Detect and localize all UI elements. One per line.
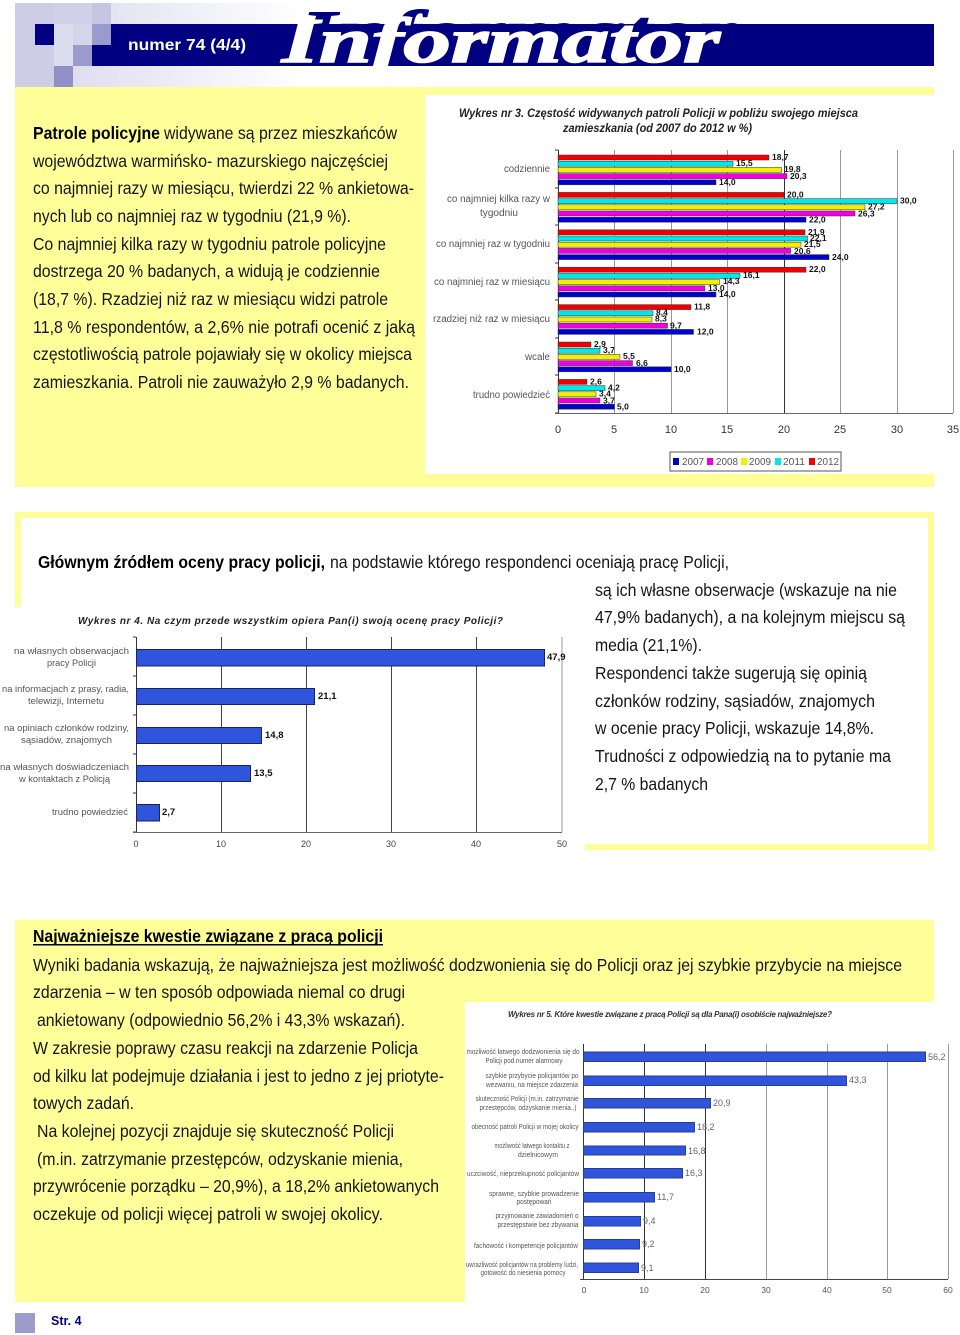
text block: patrols: (18,7 %). Rzadziej niż raz w miesiącu widzi patrole xyxy=(33,289,388,309)
legend: 2008 xyxy=(716,456,738,468)
axis values: 20 xyxy=(301,839,311,849)
axis values: 0 xyxy=(133,839,139,849)
value labels: 13,5 xyxy=(254,768,273,779)
axis values: 0 xyxy=(582,1285,587,1295)
bars: codziennie: 15,5 xyxy=(736,158,753,168)
value labels: 11,7 xyxy=(657,1192,674,1202)
text block: patrols: zamieszkania. Patroli nie zauważyło 2,9 % badanych. xyxy=(33,372,409,392)
panel: patrols xyxy=(15,87,960,487)
text block: key issues: (m.in. zatrzymanie przestępców, odzyskanie mienia, xyxy=(37,1149,403,1169)
value labels: 56,2 xyxy=(928,1052,946,1062)
chart title: Wykres nr 4. Na czym przede wszystkim opiera Pan(i) swoją ocenę pracy Policji? xyxy=(78,616,503,627)
axis values xyxy=(555,424,959,436)
text block: key issues: Na kolejnej pozycji znajduje się skuteczność Policji xyxy=(37,1121,394,1141)
value labels: 18,2 xyxy=(697,1122,715,1132)
legend: 2011 xyxy=(783,456,805,468)
category labels: wcale xyxy=(524,352,550,363)
axis values: 25 xyxy=(834,424,846,436)
bars: wcale: 2,9 xyxy=(594,339,606,349)
category labels: na informacjach z prasy, radia, xyxy=(2,684,129,695)
value labels xyxy=(641,1052,946,1273)
bars xyxy=(584,1052,926,1272)
bars: trudno powiedzieć: 3,7 xyxy=(603,395,615,405)
bars: rzadziej niż raz w miesiącu: 8,3 xyxy=(655,314,667,324)
value labels: 47,9 xyxy=(547,652,566,663)
text block: key issues: zdarzenia – w ten sposób odpowiada niemal co drugi xyxy=(33,982,405,1002)
bars: raz w tygodniu: 24,0 xyxy=(832,252,849,262)
text block: source of evaluation: w ocenie pracy Policji, wskazuje 14,8%. xyxy=(594,718,874,738)
logo: Informator xyxy=(281,0,736,76)
chart title: zamieszkania (od 2007 do 2012 w %) xyxy=(562,121,752,135)
category labels: sąsiadów, znajomych xyxy=(21,735,112,746)
header banner xyxy=(15,0,934,87)
axis values: 30 xyxy=(386,839,396,849)
category labels: trudno powiedzieć xyxy=(473,390,550,401)
axis values: 10 xyxy=(216,839,226,849)
text block: patrols: co najmniej razy w miesiącu, twierdzi 22 % ankietowa- xyxy=(33,178,414,198)
text block: patrols: widywane są przez mieszkańców xyxy=(163,123,397,143)
text block: key issues xyxy=(33,955,902,1224)
axis values: 10 xyxy=(665,424,677,436)
bars: rzadziej niż raz w miesiącu xyxy=(558,302,714,337)
bars: codziennie: 19,8 xyxy=(784,164,801,174)
text block: source of evaluation xyxy=(38,552,905,794)
axis values: 40 xyxy=(822,1285,832,1295)
bars: wcale xyxy=(558,339,691,374)
category labels: co najmniej raz w miesiącu xyxy=(434,277,550,288)
chart: Wykres nr 5 xyxy=(466,1010,953,1295)
category labels: uczciwość, nieprzekupność policjantów xyxy=(467,1171,580,1178)
text block: source of evaluation: 2,7 % badanych xyxy=(595,774,708,794)
text block: source of evaluation: 47,9% badanych), a na kolejnym miejscu są xyxy=(595,607,905,627)
value labels xyxy=(162,652,566,818)
text block: key issues: ankietowany (odpowiednio 56,2% i 43,3% wskazań). xyxy=(37,1010,405,1030)
axis values: 15 xyxy=(721,424,733,436)
value labels: 2,7 xyxy=(162,807,175,818)
axis values: 35 xyxy=(947,424,959,436)
bars: raz w miesiącu xyxy=(558,264,826,299)
category labels: co najmniej kilka razy w xyxy=(447,194,551,205)
category labels: uwrażliwość policjantów na problemy ludzi, xyxy=(466,1262,578,1269)
bars: trudno powiedzieć: 5,0 xyxy=(617,401,629,411)
category labels: w kontaktach z Policją xyxy=(18,774,111,785)
issue number: numer 74 (4/4) xyxy=(128,37,246,54)
value labels: 16,3 xyxy=(685,1168,703,1178)
bars: wcale: 10,0 xyxy=(674,364,691,374)
value labels: 43,3 xyxy=(849,1075,867,1085)
bars: raz w tygodniu: 22,1 xyxy=(810,233,827,243)
bars: rzadziej niż raz w miesiącu: 8,4 xyxy=(656,308,668,318)
text block: source of evaluation: Trudności z odpowiedzią na to pytanie ma xyxy=(595,746,891,766)
category labels: postępowań xyxy=(516,1199,552,1206)
text block: key issues: oczekuje od policji więcej patroli w swojej okolicy. xyxy=(33,1204,383,1224)
text block: patrols: dostrzega 20 % badanych, a widują je codziennie xyxy=(33,261,380,281)
chart title xyxy=(459,106,858,135)
text block: source of evaluation: na podstawie którego respondenci oceniają pracę Policji, xyxy=(330,552,729,572)
category labels xyxy=(433,164,551,401)
bars: codziennie: 14,0 xyxy=(719,177,736,187)
text block: patrols: nych lub co najmniej raz w tygodniu (21,9 %). xyxy=(33,206,351,226)
value labels: 20,9 xyxy=(713,1098,731,1108)
category labels: szybkie przybycie policjantów po xyxy=(486,1073,579,1080)
text block: patrols: województwa warmińsko- mazurskiego najczęściej xyxy=(32,151,388,171)
axis values: 30 xyxy=(761,1285,771,1295)
bars: trudno powiedzieć: 2,6 xyxy=(590,376,602,386)
chart: Wykres nr 3 xyxy=(433,106,959,471)
bars: kilka razy w tygodniu: 22,0 xyxy=(809,214,826,224)
bars: raz w tygodniu: 21,9 xyxy=(808,227,825,237)
axis values: 60 xyxy=(943,1285,953,1295)
logo: Informator: Informator xyxy=(298,0,736,65)
bars: rzadziej niż raz w miesiącu: 9,7 xyxy=(670,321,682,331)
logo: Informator: Informator xyxy=(281,5,722,76)
text block: source of evaluation: są ich własne obserwacje (wskazuje na nie xyxy=(595,580,897,600)
axis values: 0 xyxy=(555,424,561,436)
chart title: Wykres nr 3. Częstość widywanych patroli Policji w pobliżu swojego miejsca xyxy=(459,106,858,120)
category labels: rzadziej niż raz w miesiącu xyxy=(433,314,550,325)
category labels: gotowość do niesienia pomocy xyxy=(480,1270,566,1277)
bars xyxy=(136,650,544,821)
bars: kilka razy w tygodniu: 26,3 xyxy=(858,208,875,218)
text block: key issues: towych zadań. xyxy=(33,1093,134,1113)
bars: raz w miesiącu: 14,3 xyxy=(723,276,740,286)
text block: key issues: przywrócenie porządku – 20,9%), a 18,2% ankietowanych xyxy=(33,1176,439,1196)
footer: page number xyxy=(15,1313,82,1333)
category labels: przestępstwie bez zbywania xyxy=(498,1222,579,1229)
text block: patrols: częstotliwością patrole pojawiały się w okolicy miejsca xyxy=(33,344,412,364)
category labels: Policji pod numer alarmowy xyxy=(486,1058,563,1065)
axis values: 30 xyxy=(891,424,903,436)
bars: wcale: 5,5 xyxy=(623,351,635,361)
text block: key issues: W zakresie poprawy czasu reakcji na zdarzenie Policja xyxy=(33,1038,418,1058)
text block: patrols: 11,8 % respondentów, a 2,6% nie potrafi ocenić z jaką xyxy=(33,317,415,337)
category labels: na własnych doświadczeniach xyxy=(0,762,129,773)
bars: raz w tygodniu xyxy=(558,227,849,262)
axis values: 10 xyxy=(639,1285,649,1295)
axis values xyxy=(133,839,567,849)
text block: source of evaluation: Respondenci także sugerują się opinią xyxy=(595,663,867,683)
bars: rzadziej niż raz w miesiącu: 11,8 xyxy=(694,302,710,312)
legend: 2007 xyxy=(682,456,704,468)
axis values: 20 xyxy=(700,1285,710,1295)
bars: kilka razy w tygodniu: 20,0 xyxy=(787,189,804,199)
text block: patrols: Patrole policyjne xyxy=(33,123,160,143)
text block: key issues: od kilku lat podejmuje działania i jest to jedno z jej priotyte- xyxy=(33,1066,444,1086)
axis values: 50 xyxy=(557,839,567,849)
bars: rzadziej niż raz w miesiącu: 12,0 xyxy=(697,327,714,337)
category labels: dzielnicowym xyxy=(518,1152,558,1159)
footer: page number: Str. 4 xyxy=(51,1314,82,1328)
category labels xyxy=(466,1049,580,1277)
value labels: 14,8 xyxy=(265,730,284,741)
bars: trudno powiedzieć: 3,4 xyxy=(599,388,611,398)
category labels: na opiniach członków rodziny, xyxy=(4,723,129,734)
category labels: tygodniu xyxy=(480,208,518,219)
bars: wcale: 6,6 xyxy=(636,358,648,368)
legend: 2012 xyxy=(817,456,839,468)
text block: source of evaluation: członków rodziny, sąsiadów, znajomych xyxy=(595,691,875,711)
category labels: skuteczność Policji (m.in. zatrzymanie xyxy=(476,1096,579,1103)
bars: raz w miesiącu: 22,0 xyxy=(809,264,826,274)
category labels: na własnych obserwacjach xyxy=(14,646,129,657)
category labels: fachowość i kompetencje policjantów xyxy=(474,1243,579,1250)
category labels: co najmniej raz w tygodniu xyxy=(436,239,550,250)
bars: codziennie xyxy=(558,152,807,187)
bars: wcale: 3,7 xyxy=(603,345,615,355)
value labels: 16,8 xyxy=(688,1146,706,1156)
chart title: Wykres nr 5. Które kwestie związane z pracą Policji są dla Pana(i) osobiście najważniejsze? xyxy=(508,1010,832,1019)
text block: source of evaluation: media (21,1%). xyxy=(595,635,702,655)
panel: source of evaluation xyxy=(0,512,934,850)
category labels: możliwość łatwego dodzwonienia się do xyxy=(466,1049,580,1056)
axis values: 40 xyxy=(471,839,481,849)
bars: kilka razy w tygodniu xyxy=(558,189,917,224)
category labels: sprawne, szybkie prowadzenie xyxy=(489,1191,579,1198)
bars: raz w miesiącu: 13,0 xyxy=(708,283,725,293)
category labels: przestępców, odzyskanie mienia..) xyxy=(480,1105,576,1112)
bars: kilka razy w tygodniu: 27,2 xyxy=(868,201,885,211)
category labels: codziennie xyxy=(504,164,550,175)
value labels: 21,1 xyxy=(318,691,337,702)
bars: codziennie: 18,7 xyxy=(772,152,789,162)
panel: key issues xyxy=(15,920,953,1302)
text block: source of evaluation: Głównym źródłem oceny pracy policji, xyxy=(38,552,325,572)
chart: Wykres nr 4 xyxy=(0,616,567,849)
text block: patrols: Co najmniej kilka razy w tygodniu patrole policyjne xyxy=(33,234,386,254)
value labels: 9,2 xyxy=(642,1239,655,1249)
axis values: 50 xyxy=(882,1285,892,1295)
bars: raz w tygodniu: 20,6 xyxy=(794,246,811,256)
axis values xyxy=(582,1285,953,1295)
value labels: 9,4 xyxy=(643,1216,656,1226)
legend xyxy=(670,452,841,471)
bars: raz w miesiącu: 16,1 xyxy=(743,270,760,280)
bars: trudno powiedzieć xyxy=(558,376,629,411)
category labels: telewizji, Internetu xyxy=(28,696,104,707)
category labels: pracy Policji xyxy=(47,658,96,669)
category labels xyxy=(0,646,129,818)
bars: codziennie: 20,3 xyxy=(790,171,807,181)
category labels: obecność patroli Policji w mojej okolicy xyxy=(472,1124,579,1131)
bars: raz w tygodniu: 21,5 xyxy=(804,239,821,249)
axis values: 20 xyxy=(778,424,790,436)
category labels: trudno powiedzieć xyxy=(52,807,128,818)
bars: trudno powiedzieć: 4,2 xyxy=(608,382,620,392)
text block: patrols xyxy=(32,123,415,392)
bars: raz w miesiącu: 14,0 xyxy=(719,289,736,299)
bars: kilka razy w tygodniu: 30,0 xyxy=(900,195,917,205)
category labels: wezwaniu, na miejsce zdarzenia xyxy=(485,1082,578,1089)
heading: Najważniejsze kwestie związane z pracą policji xyxy=(33,926,383,946)
legend: 2009 xyxy=(749,456,771,468)
axis values: 5 xyxy=(611,424,617,436)
value labels: 9,1 xyxy=(641,1263,654,1273)
category labels: możliwość łatwego kontaktu z xyxy=(494,1143,570,1150)
category labels: przyjmowanie zawiadomień o xyxy=(496,1213,579,1220)
